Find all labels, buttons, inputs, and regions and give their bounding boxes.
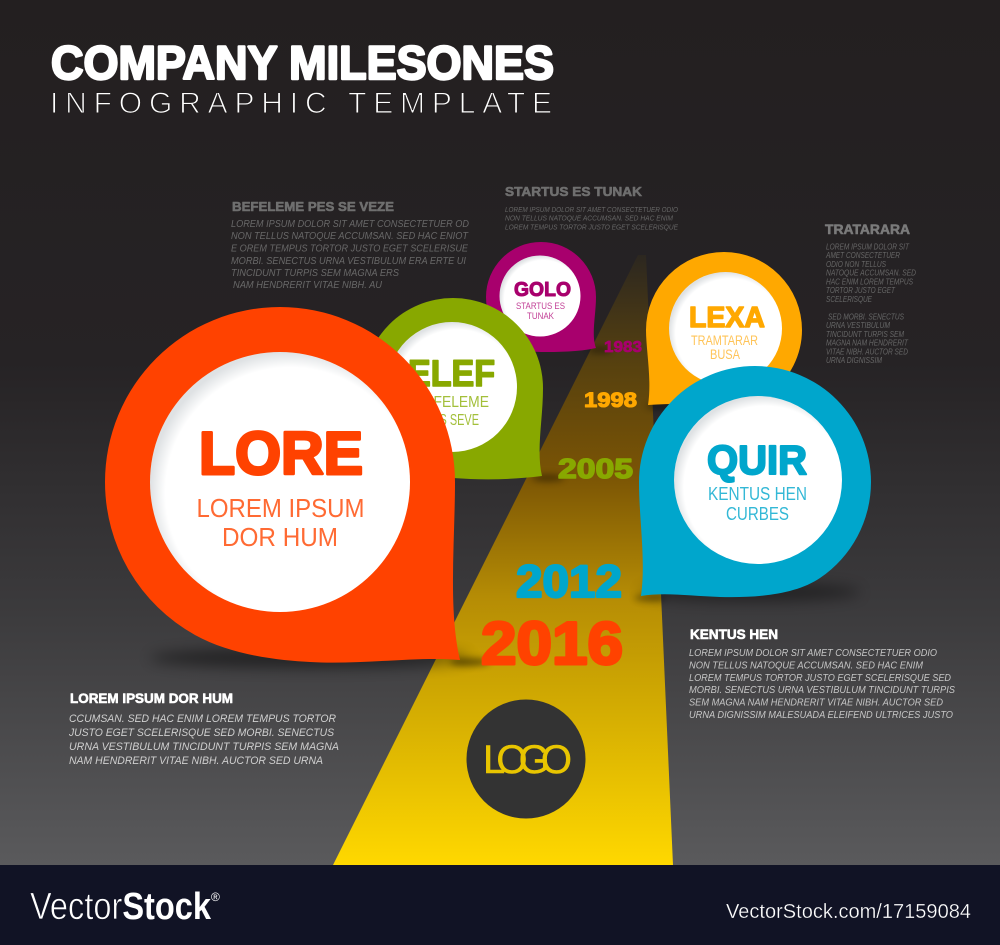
pin: quir: CURBES (726, 504, 789, 524)
year 2016: 2016 (481, 610, 623, 677)
text block: kentus hen (689, 627, 955, 721)
text block: tratarara: VITAE NIBH. AUCTOR SED (826, 348, 908, 356)
pin: quir: QUIR (707, 437, 807, 483)
text block: tratarara: TRATARARA (825, 222, 910, 237)
text block: tratarara: URNA VESTIBULUM (826, 321, 890, 330)
text block: tratarara: LOREM IPSUM DOLOR SIT (826, 242, 910, 252)
pin: golo: STARTUS ES (516, 301, 565, 312)
timeline road (333, 255, 673, 865)
text block: kentus hen: URNA DIGNISSIM MALESUADA ELEIFEND ULTRICES JUSTO (689, 709, 953, 721)
year 1998: 1998 (584, 389, 637, 412)
text block: kentus hen: LOREM TEMPUS TORTOR JUSTO EGET SCELERISQUE SED (689, 672, 951, 684)
text block: tratarara: URNA DIGNISSIM (826, 356, 882, 365)
text block: lorem ipsum dor hum: URNA VESTIBULUM TINCIDUNT TURPIS SEM MAGNA (69, 741, 339, 753)
text block: tratarara: AMET CONSECTETUER (825, 251, 900, 260)
logo: LOGO (483, 738, 572, 782)
text block: befeleme: E OREM TEMPUS TORTOR JUSTO EGET SCELERISUE (231, 242, 469, 254)
text block: lorem ipsum dor hum: JUSTO EGET SCELERISQUE SED MORBI. SENECTUS (68, 727, 335, 739)
text block: tratarara: TORTOR JUSTO EGET (826, 286, 896, 295)
pin: lore (105, 307, 490, 668)
text block: befeleme: TINCIDUNT TURPIS SEM MAGNA ERS (231, 267, 399, 279)
pin: lexa: LEXA (689, 302, 765, 334)
text block: startus es tunak: LOREM TEMPUS TORTOR JUSTO EGET SCELERISQUE (505, 222, 679, 232)
text block: kentus hen: MORBI. SENECTUS URNA VESTIBULUM TINCIDUNT TURPIS (689, 684, 955, 696)
text block: tratarara: HAC ENIM LOREM TEMPUS (826, 278, 914, 286)
text block: befeleme (231, 199, 469, 291)
text block: befeleme: NON TELLUS NATOQUE ACCUMSAN. SED HAC ENIOT (231, 230, 469, 242)
text block: kentus hen: KENTUS HEN (690, 627, 778, 642)
pin: elef (363, 298, 564, 482)
text block: befeleme: MORBI. SENECTUS URNA VESTIBULUM ERA ERTE UI (231, 255, 466, 267)
year 1983: 1983 (604, 339, 642, 356)
logo (466, 700, 586, 818)
text block: lorem ipsum dor hum (68, 691, 339, 767)
pin: lore: LORE (199, 420, 363, 487)
footer bar (0, 865, 1000, 945)
text block: tratarara: NATOQUE ACCUMSAN. SED (826, 269, 916, 278)
year 2012: 2012 (516, 556, 622, 607)
pin: lore: LOREM IPSUM (196, 493, 364, 523)
text block: kentus hen: NON TELLUS NATOQUE ACCUMSAN. SED HAC ENIM (689, 660, 923, 672)
registered mark: ® (211, 890, 220, 904)
pin: lore: DOR HUM (222, 522, 338, 552)
text block: lorem ipsum dor hum: CCUMSAN. SED HAC ENIM LOREM TEMPUS TORTOR (69, 713, 336, 725)
pin: lexa (646, 252, 802, 409)
pin: quir (634, 366, 871, 601)
text block: tratarara (825, 222, 916, 365)
pin: elef: ELEF (408, 353, 495, 394)
watermark url: VectorStock.com/17159084 (726, 901, 971, 923)
text block: kentus hen: LOREM IPSUM DOLOR SIT AMET CONSECTETUER ODIO (689, 647, 937, 659)
year 2005: 2005 (558, 453, 633, 484)
text block: befeleme: LOREM IPSUM DOLOR SIT AMET CONSECTETUER OD (231, 218, 469, 230)
title: COMPANY MILESONES (51, 36, 554, 89)
text block: tratarara: ODIO NON TELLUS (826, 260, 887, 269)
text block: startus es tunak: LOREM IPSUM DOLOR SIT AMET CONSECTETUER ODIO (505, 205, 678, 214)
pin: quir: KENTUS HEN (708, 484, 807, 504)
text block: startus es tunak: STARTUS ES TUNAK (505, 184, 643, 199)
text block: startus es tunak (505, 184, 679, 232)
text block: befeleme: BEFELEME PES SE VEZE (232, 199, 394, 214)
pin: lexa: TRAMTARAR (691, 333, 758, 348)
watermark logo: VectorStock (30, 886, 212, 928)
subtitle: INFOGRAPHIC TEMPLATE (50, 87, 552, 120)
pin: golo (486, 242, 612, 353)
text block: tratarara: SED MORBI. SENECTUS (828, 312, 905, 322)
text block: kentus hen: SEM MAGNA NAM HENDRERIT VITAE NIBH. AUCTOR SED (689, 696, 943, 708)
text block: tratarara: SCELERISQUE (826, 295, 873, 304)
pin: elef: BEFELEME (415, 394, 489, 411)
pin: lexa: BUSA (710, 347, 740, 362)
text block: befeleme: NAM HENDRERIT VITAE NIBH. AU (233, 279, 382, 291)
text block: lorem ipsum dor hum: LOREM IPSUM DOR HUM (70, 691, 233, 706)
text block: startus es tunak: NON TELLUS NATOQUE ACCUMSAN. SED HAC ENIM (505, 214, 674, 222)
text block: lorem ipsum dor hum: NAM HENDRERIT VITAE NIBH. AUCTOR SED URNA (69, 755, 323, 767)
text block: tratarara: TINCIDUNT TURPIS SEM (826, 330, 904, 339)
pin: elef: PES SEVE (425, 412, 479, 429)
pin: golo: TUNAK (527, 311, 555, 322)
text block: tratarara: MAGNA NAM HENDRERIT (826, 339, 909, 348)
pin: golo: GOLO (514, 279, 571, 301)
